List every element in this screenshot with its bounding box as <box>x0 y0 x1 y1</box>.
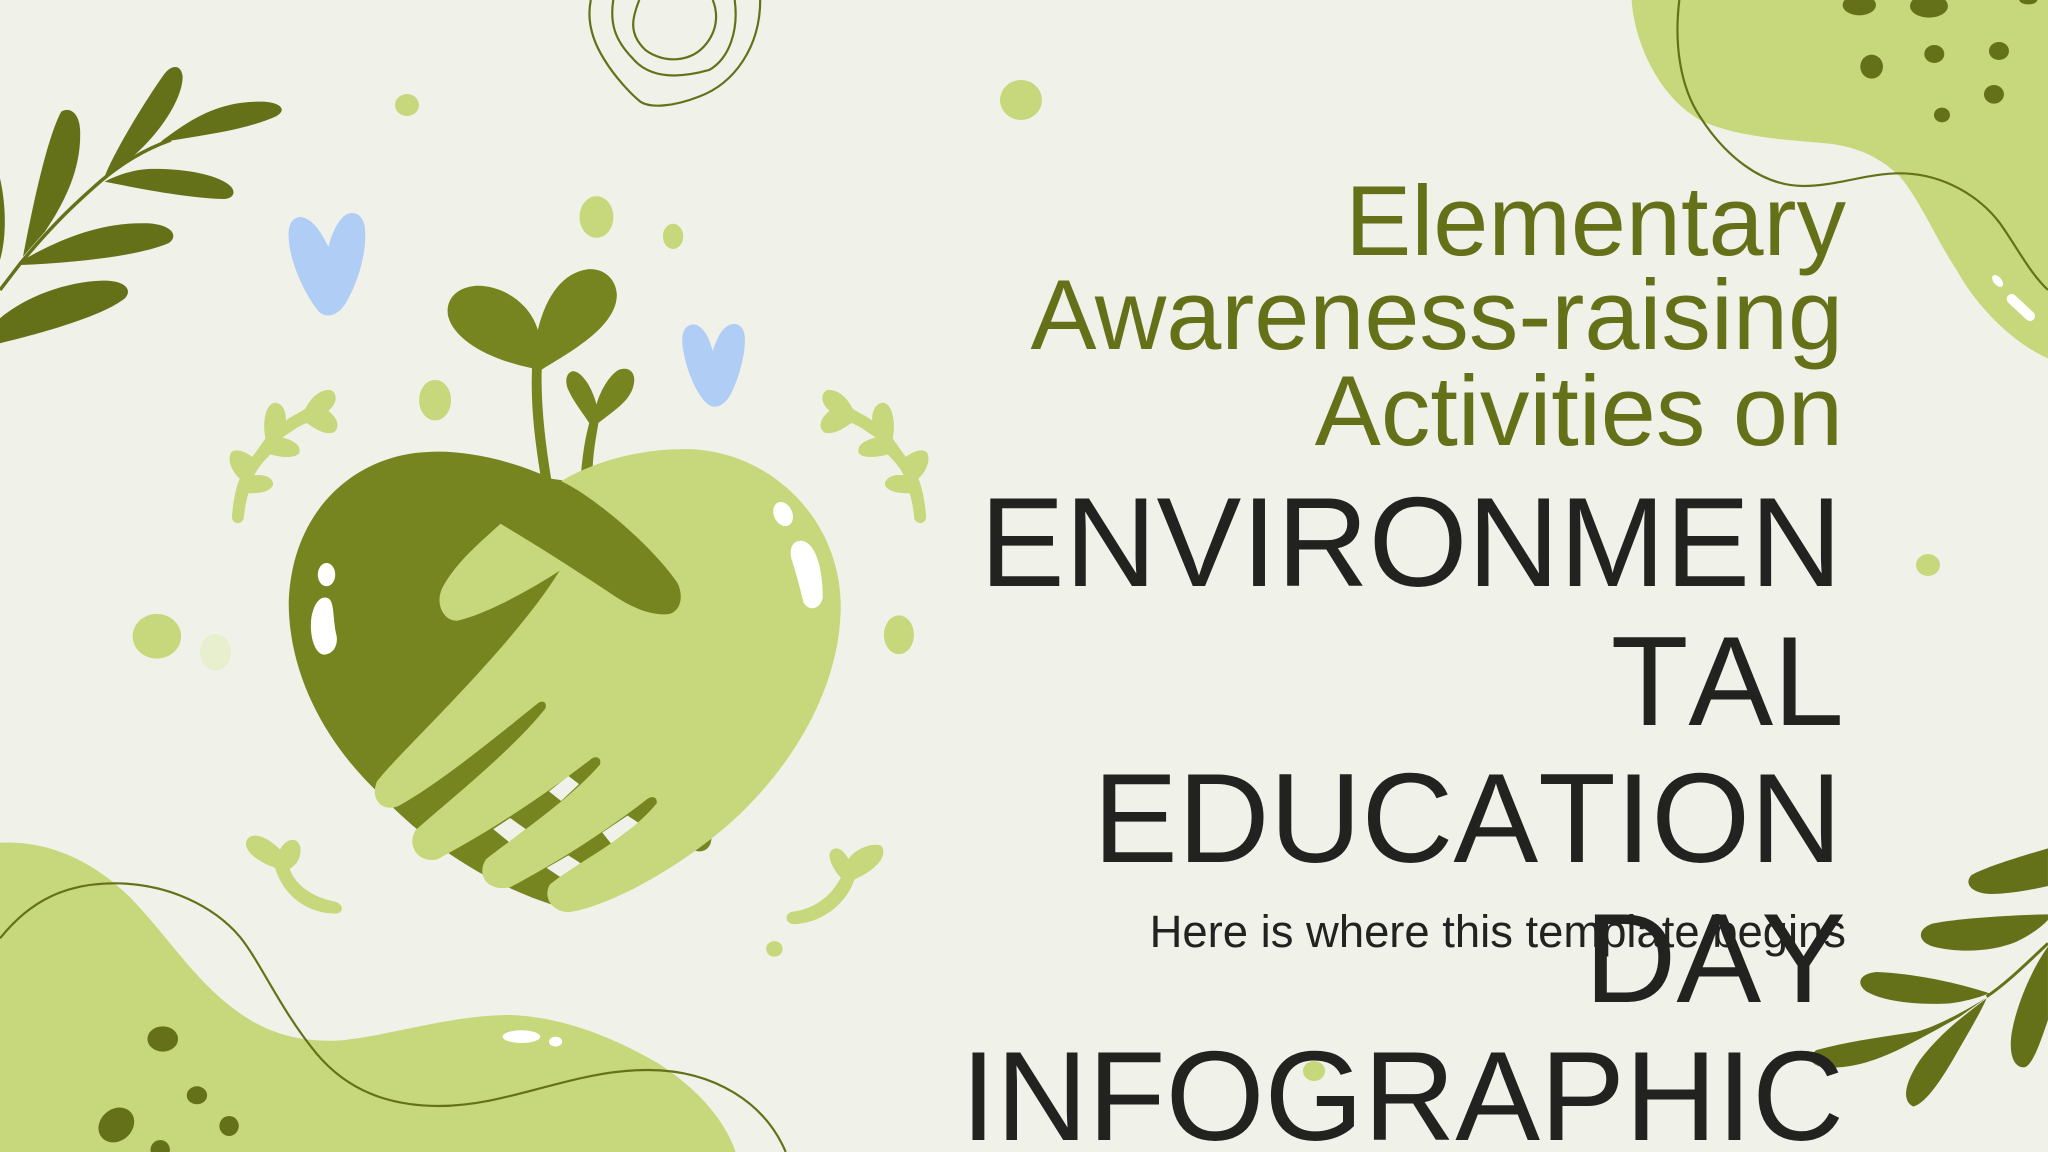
leaf branch: top left <box>0 67 282 343</box>
highlights <box>311 499 823 655</box>
twig: upper left <box>230 390 338 523</box>
title: Environmental Education Day Infographic: ENVIRONMEN <box>980 471 1842 613</box>
doodle: concentric rings <box>589 0 760 106</box>
blob: top right corner <box>1632 0 2048 358</box>
title: Environmental Education Day Infographic: TAL <box>1611 610 1844 752</box>
decorative dots <box>395 80 1940 1081</box>
heart: dark left hand <box>289 452 685 905</box>
leaf branch: bottom right <box>1811 848 2048 1107</box>
subtitle: Elementary Awareness-raising Activities on: Activities on <box>1315 355 1843 466</box>
subtitle: Elementary Awareness-raising Activities on: Awareness-raising <box>1030 259 1843 370</box>
icon: blue heart large <box>289 213 365 315</box>
title: Environmental Education Day Infographic: EDUCATION <box>1093 747 1842 889</box>
gaps between fingers <box>493 776 639 878</box>
title: Environmental Education Day Infographic <box>961 471 1846 1152</box>
dots around the heart <box>133 196 914 957</box>
illustration: heart handshake with sprouts <box>133 196 928 957</box>
heart: small dark knuckle <box>692 830 711 851</box>
sprout: lower left <box>246 836 342 914</box>
sprout: small seedling <box>566 369 634 474</box>
subtitle: Elementary Awareness-raising Activities on <box>1030 165 1846 466</box>
sprout: large seedling <box>448 269 617 480</box>
heart: light right hand <box>375 449 841 912</box>
sprout: lower right <box>786 845 883 924</box>
tagline: Here is where this template begins <box>1150 906 1846 957</box>
icon: blue heart small <box>682 324 745 407</box>
twig: upper right <box>821 390 928 523</box>
blob: bottom left corner <box>0 842 786 1152</box>
title: Environmental Education Day Infographic: DAY <box>1584 887 1846 1029</box>
subtitle: Elementary Awareness-raising Activities on: Elementary <box>1345 165 1846 276</box>
